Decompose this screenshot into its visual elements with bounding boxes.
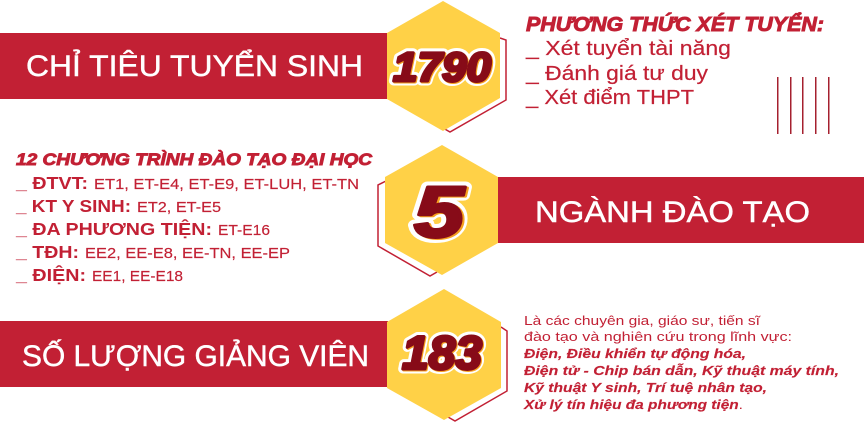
hexagon: 183 (387, 289, 507, 421)
text block: admission methods: _ Xét tuyển tài năng (525, 37, 731, 60)
hexagon: 5 (378, 145, 498, 276)
hexagon: 183: 183 (402, 326, 482, 379)
text block: programmes list: EE2, EE-E8, EE-TN, EE-EP (85, 245, 290, 262)
text block: faculty description: Điện, Điều khiển tự động hóa, (524, 346, 746, 361)
hexagon: 1790: 1790 (393, 44, 491, 90)
text block: programmes list: _ KT Y SINH: (15, 196, 131, 216)
panel: admission quota (0, 1, 824, 132)
banner: training majors (498, 177, 864, 243)
text block: programmes list: _ ĐIỆN: (15, 264, 86, 285)
banner: admission quota (0, 33, 388, 99)
banner: admission quota: CHỈ TIÊU TUYỂN SINH (26, 49, 363, 83)
hexagon: 183: 183 (403, 327, 483, 380)
text block: admission methods: _ Xét điểm THPT (525, 86, 695, 109)
text block: admission methods (525, 12, 824, 109)
text block: admission methods: PHƯƠNG THỨC XÉT TUYỂN: (526, 12, 824, 36)
text block: faculty description (523, 313, 839, 412)
text block: admission methods: _ Đánh giá tư duy (525, 62, 709, 85)
banner: faculty count (0, 321, 388, 387)
text block: programmes list: _ ĐA PHƯƠNG TIỆN: (15, 218, 212, 239)
hexagon: 1790: 1790 (394, 45, 492, 91)
banner: faculty count: SỐ LƯỢNG GIẢNG VIÊN (22, 339, 369, 373)
banner: training majors: NGÀNH ĐÀO TẠO (535, 196, 810, 229)
panel: training majors (15, 145, 864, 285)
text block: programmes list: _ TĐH: (15, 242, 79, 262)
hexagon: 1790 (387, 1, 506, 132)
text block: programmes list: _ ĐTVT: (15, 173, 88, 193)
text block: programmes list: ET-E16 (218, 222, 270, 239)
text block: faculty description: Là các chuyên gia, giáo sư, tiến sĩ (524, 313, 762, 328)
text block: faculty description: Điện tử - Chip bán dẫn, Kỹ thuật máy tính, (524, 363, 839, 378)
hexagon: 183: 183 (402, 326, 482, 379)
text block: faculty description: Kỹ thuật Y sinh, Trí tuệ nhân tạo, (524, 380, 767, 395)
text block: programmes list: 12 CHƯƠNG TRÌNH ĐÀO TẠO ĐẠI HỌC (16, 150, 373, 169)
text block: programmes list (15, 150, 373, 285)
hexagon: 5: 5 (414, 173, 465, 253)
text block: programmes list: EE1, EE-E18 (92, 268, 183, 285)
hexagon: 5: 5 (414, 173, 465, 253)
hexagon: 1790: 1790 (393, 44, 491, 90)
text block: faculty description: Xử lý tín hiệu đa phương tiện . (523, 397, 743, 412)
panel: faculty count (0, 289, 839, 421)
hexagon: 5: 5 (416, 174, 467, 254)
text block: faculty description: đào tạo và nghiên cứu trong lĩnh vực: (524, 329, 792, 344)
text block: programmes list: ET2, ET-E5 (137, 199, 221, 216)
text block: programmes list: ET1, ET-E4, ET-E9, ET-LUH, ET-TN (94, 176, 359, 193)
